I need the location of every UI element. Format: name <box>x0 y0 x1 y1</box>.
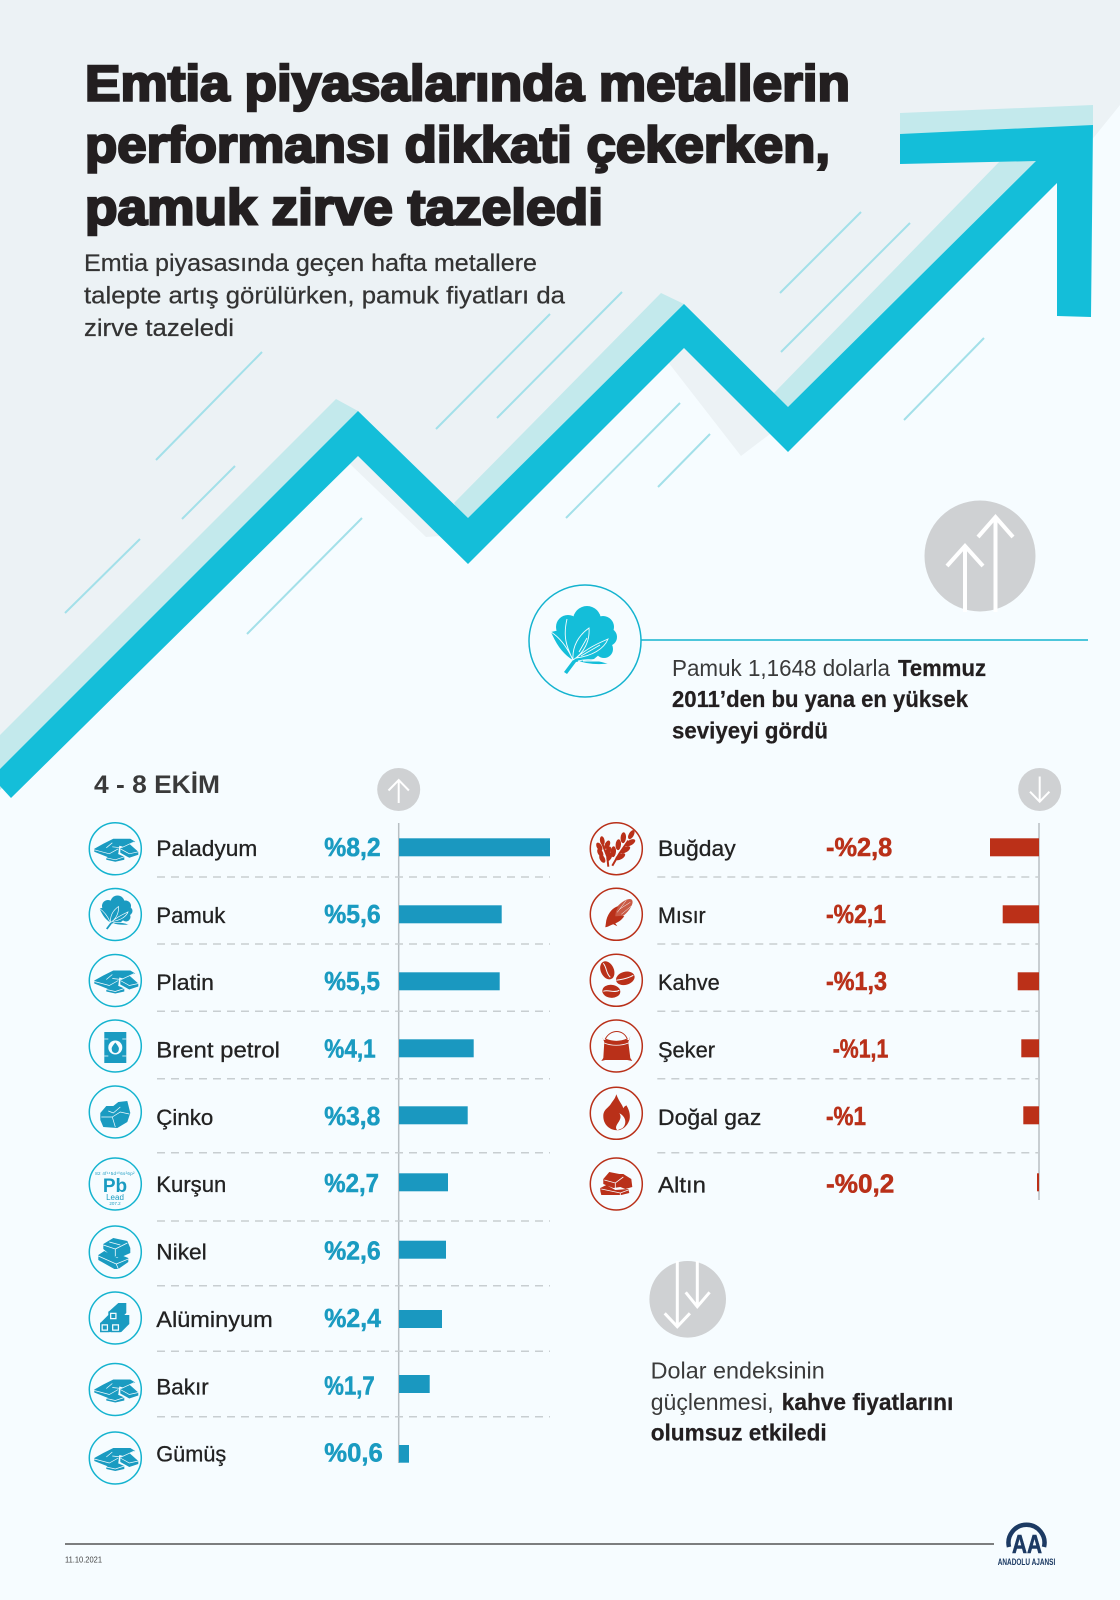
subtitle: zirve tazeledi <box>84 315 234 342</box>
row: Kahve <box>590 954 1039 1006</box>
row: Buğday: Buğday <box>658 836 736 861</box>
panel: falling commodities chart <box>590 823 1039 1210</box>
row: Çinko: %3,8 <box>324 1103 380 1131</box>
row: Gümüş <box>89 1432 409 1484</box>
row: Kurşun: %2,7 <box>324 1170 379 1198</box>
logo: Anadolu Ajansı: AA <box>1012 1529 1042 1559</box>
title: pamuk zirve tazeledi <box>85 180 603 236</box>
row: Pamuk: %5,6 <box>324 901 381 929</box>
row: Alüminyum: %2,4 <box>324 1305 382 1333</box>
row: Platin <box>89 954 500 1006</box>
row: Doğal gaz: Doğal gaz <box>658 1105 761 1130</box>
icon: down arrow badge <box>1018 768 1061 811</box>
row: Brent petrol <box>89 1020 474 1072</box>
cotton callout text: Pamuk 1,1648 dolarla <box>672 655 890 681</box>
dollar index text: kahve fiyatlarını <box>782 1389 953 1415</box>
rising arrow <box>0 105 1093 798</box>
panel: rising commodities chart <box>89 823 550 1484</box>
title: Emtia piyasalarında metallerin <box>85 56 850 112</box>
row: Şeker: Şeker <box>658 1038 715 1063</box>
row: Kurşun: 207.2 <box>109 1201 121 1206</box>
icon: cotton <box>529 585 641 697</box>
row: Mısır <box>590 888 1039 940</box>
icon: two up arrows <box>924 500 1036 612</box>
dollar index text: Dolar endeksinin <box>651 1357 825 1383</box>
row: Gümüş: %0,6 <box>324 1440 383 1468</box>
row: Bakır: %1,7 <box>324 1372 375 1400</box>
row: Altın: -%0,2 <box>826 1170 894 1198</box>
icon: up arrow badge <box>377 768 420 811</box>
row: Pamuk <box>89 888 502 940</box>
title: performansı dikkati çekerken, <box>85 117 830 173</box>
row: Buğday: -%2,8 <box>826 834 892 862</box>
cotton callout connector <box>640 639 1088 641</box>
row: Kahve: -%1,3 <box>826 968 887 996</box>
row: Mısır: Mısır <box>658 903 706 928</box>
title <box>85 56 850 236</box>
row: Buğday <box>590 823 1039 875</box>
row: Paladyum: Paladyum <box>156 836 257 861</box>
row: Nikel: %2,6 <box>324 1238 381 1266</box>
cotton callout text: 2011’den bu yana en yüksek <box>672 686 968 712</box>
dollar index text <box>651 1357 953 1446</box>
row: Kahve: Kahve <box>658 970 720 995</box>
row: Kurşun: Lead <box>106 1193 124 1202</box>
row: Gümüş: Gümüş <box>156 1442 226 1467</box>
cotton callout text: seviyeyi gördü <box>672 718 828 744</box>
row: Doğal gaz <box>590 1087 1039 1139</box>
row: Şeker <box>590 1020 1039 1072</box>
dollar index text: olumsuz etkiledi <box>651 1420 827 1446</box>
subtitle: talepte artış görülürken, pamuk fiyatları da <box>84 282 566 310</box>
row: Bakır: Bakır <box>156 1374 209 1399</box>
row: Altın <box>590 1158 1039 1210</box>
logo: Anadolu Ajansı: ANADOLU AJANSI <box>998 1557 1055 1568</box>
heading: date range: 4 - 8 EKİM <box>94 771 220 799</box>
row: Kurşun: Pb <box>103 1176 127 1197</box>
row: Alüminyum <box>89 1292 442 1344</box>
background gray shape <box>0 0 1120 786</box>
row: Paladyum: %8,2 <box>324 834 381 862</box>
cotton callout text <box>672 655 986 744</box>
row: Kurşun: Kurşun <box>156 1172 226 1197</box>
row: Nikel: Nikel <box>156 1240 207 1265</box>
dollar index text: güçlenmesi, <box>651 1389 774 1415</box>
row: Platin: Platin <box>156 970 214 995</box>
row: Brent petrol: Brent petrol <box>156 1038 280 1063</box>
row: Mısır: -%2,1 <box>826 901 886 929</box>
icon: two down arrows <box>649 1261 726 1338</box>
cotton callout text: Temmuz <box>898 655 986 681</box>
logo: Anadolu Ajansı <box>998 1525 1055 1568</box>
row: Brent petrol: %4,1 <box>324 1036 376 1064</box>
row: Alüminyum: Alüminyum <box>156 1307 273 1332</box>
row: Nikel <box>89 1226 446 1278</box>
row: Kurşun: 82 4f¹⁴5d¹⁰6s²6p² <box>95 1171 135 1176</box>
row: Bakır <box>89 1364 430 1416</box>
subtitle: Emtia piyasasında geçen hafta metallere <box>84 250 537 277</box>
row: Paladyum <box>89 823 550 875</box>
row: Doğal gaz: -%1 <box>826 1103 866 1131</box>
row: Çinko: Çinko <box>156 1105 213 1130</box>
row: Platin: %5,5 <box>324 968 380 996</box>
row: Altın: Altın <box>658 1172 706 1197</box>
row: Çinko <box>89 1086 468 1138</box>
date: 11.10.2021 <box>65 1554 102 1564</box>
subtitle <box>84 250 566 342</box>
row: Şeker: -%1,1 <box>833 1036 888 1064</box>
row: Kurşun <box>89 1158 448 1210</box>
footer line <box>65 1543 994 1545</box>
row: Pamuk: Pamuk <box>156 903 226 928</box>
